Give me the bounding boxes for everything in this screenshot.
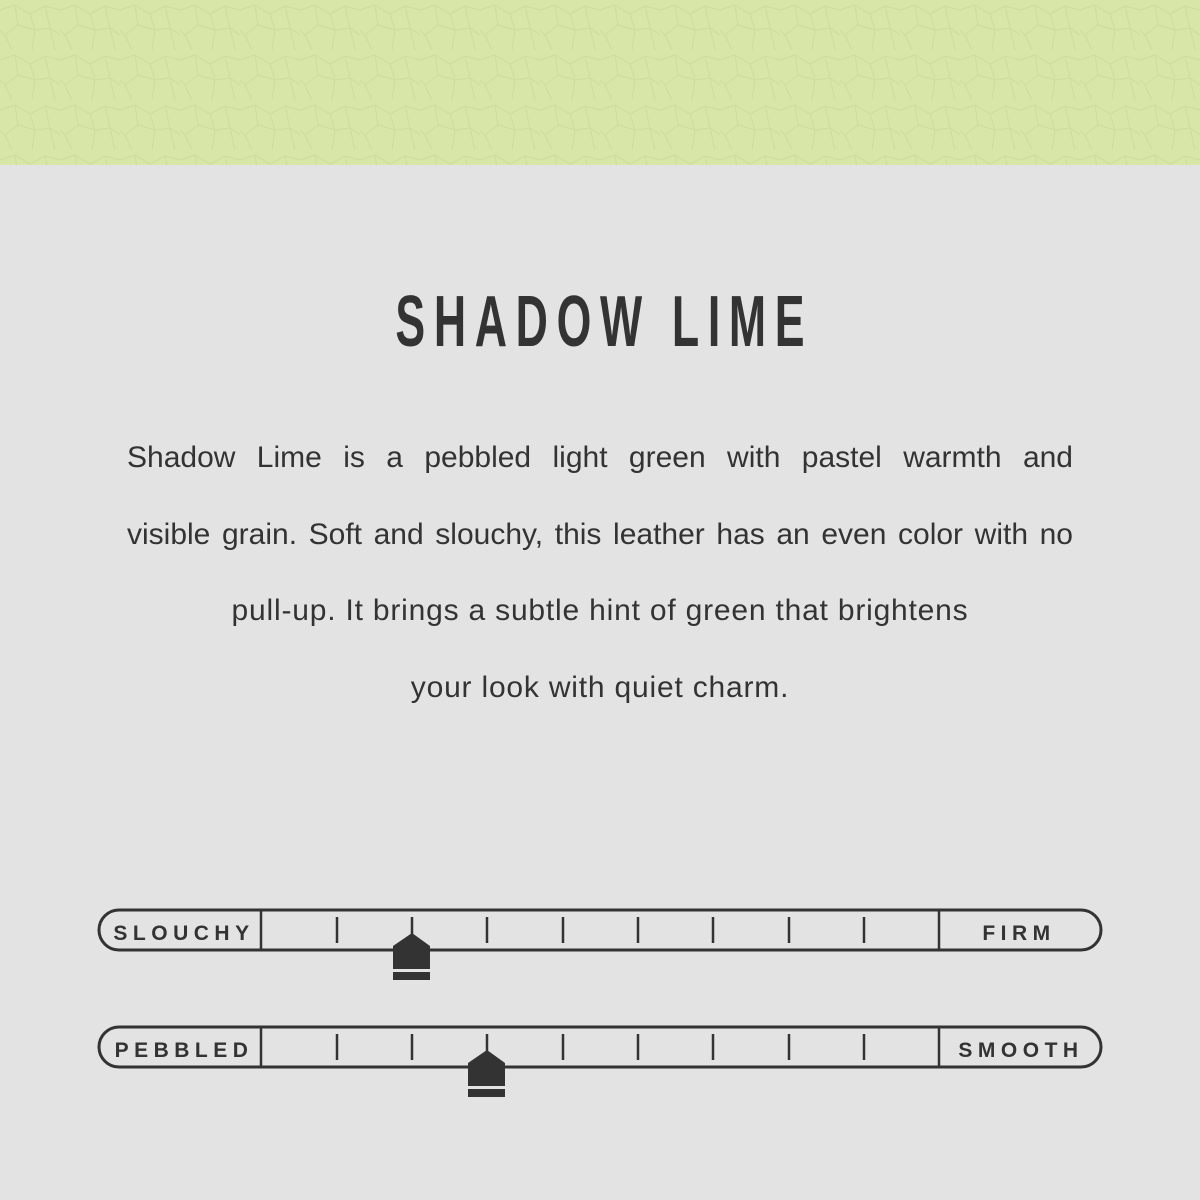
slider: pebbled-smooth: SMOOTH: [958, 1039, 1084, 1062]
description text: visible grain. Soft and slouchy, this leather has an even color with no: [127, 518, 1073, 550]
leather texture band: [0, 0, 1200, 165]
description text: [127, 441, 1073, 704]
slider: slouchy-firm: FIRM: [982, 922, 1056, 945]
description text: your look with quiet charm.: [411, 670, 789, 704]
marker: [393, 933, 430, 980]
description text: pull-up. It brings a subtle hint of green that brightens: [232, 594, 968, 627]
slider: pebbled-smooth: PEBBLED: [115, 1039, 253, 1062]
title: SHADOW LIME: [395, 282, 813, 362]
slider: slouchy-firm: [99, 910, 1101, 980]
marker: [468, 1050, 505, 1097]
slider: slouchy-firm: SLOUCHY: [113, 922, 255, 945]
description text: Shadow Lime is a pebbled light green with pastel warmth and: [127, 441, 1073, 474]
slider: pebbled-smooth: [99, 1027, 1101, 1097]
